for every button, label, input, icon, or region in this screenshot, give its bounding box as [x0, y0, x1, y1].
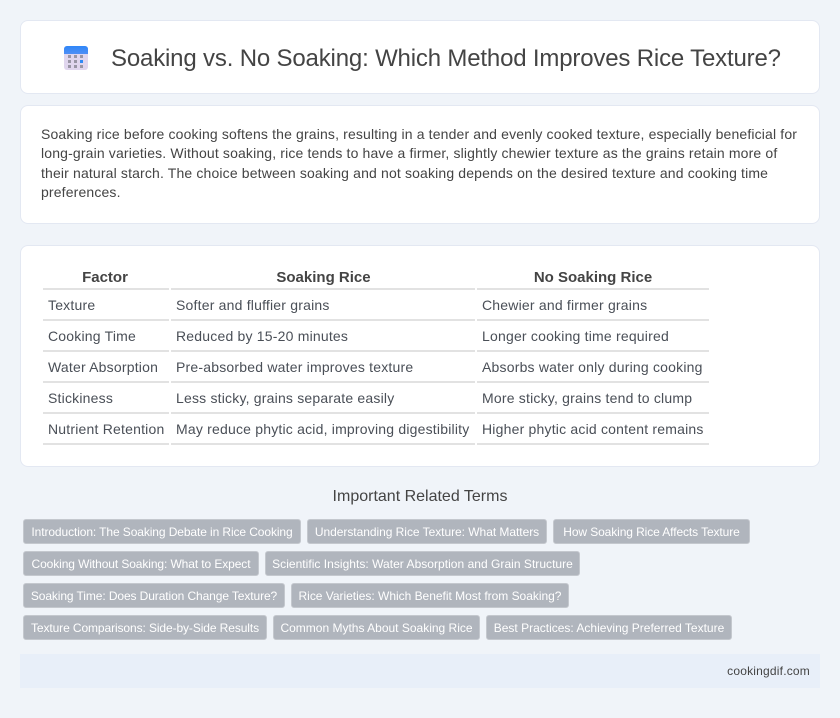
related term tags: Scientific Insights: Water Absorption and Grain Structure: [272, 557, 573, 571]
comparison table: [43, 269, 709, 445]
row: Cooking Time: Cooking Time: [48, 328, 136, 344]
related term tags: Best Practices: Achieving Preferred Texture: [494, 621, 724, 635]
row: Cooking Time: Longer cooking time required: [482, 328, 669, 344]
header panel: [20, 20, 820, 94]
related terms heading: Important Related Terms: [333, 488, 507, 505]
row: Nutrient Retention: May reduce phytic acid, improving digestibility: [176, 421, 469, 437]
row: Cooking Time: Reduced by 15-20 minutes: [176, 328, 348, 344]
intro paragraph: [41, 126, 797, 200]
row: Nutrient Retention: [48, 421, 704, 437]
footer bar: [20, 654, 820, 688]
row: Nutrient Retention: Nutrient Retention: [48, 421, 164, 437]
table header row: No Soaking Rice: [534, 269, 652, 286]
footer source: cookingdif.com: [727, 664, 810, 678]
related term tags: Soaking Time: Does Duration Change Texture?: [31, 589, 277, 603]
row: Stickiness: More sticky, grains tend to clump: [482, 390, 692, 406]
related term tags: How Soaking Rice Affects Texture: [563, 525, 740, 539]
row: Texture: Softer and fluffier grains: [176, 297, 330, 313]
row: Water Absorption: Water Absorption: [48, 359, 158, 375]
row: Texture: [48, 297, 647, 313]
table header row: Factor: [82, 269, 128, 286]
related term tags: Cooking Without Soaking: What to Expect: [32, 557, 250, 571]
row: Texture: Chewier and firmer grains: [482, 297, 647, 313]
row: Cooking Time: [48, 328, 669, 344]
related term tags: Understanding Rice Texture: What Matters: [315, 525, 539, 539]
comparison table panel: [20, 245, 820, 467]
intro text panel: [20, 105, 820, 224]
row: Water Absorption: Pre-absorbed water improves texture: [176, 359, 413, 375]
related term tags: [23, 519, 750, 640]
row: Nutrient Retention: Higher phytic acid content remains: [482, 421, 704, 437]
icon: calendar: [64, 46, 88, 70]
title: Soaking vs. No Soaking: Which Method Improves Rice Texture?: [111, 45, 781, 72]
row: Stickiness: [48, 390, 692, 406]
intro paragraph: their natural starch. The choice between soaking and not soaking depends on the desired texture and cooking time: [41, 164, 768, 180]
row: Texture: Texture: [48, 297, 95, 313]
row: Water Absorption: [48, 359, 703, 375]
row: Stickiness: Stickiness: [48, 390, 113, 406]
related term tags: Rice Varieties: Which Benefit Most from Soaking?: [299, 589, 561, 603]
intro paragraph: long-grain varieties. Without soaking, rice tends to have a firmer, slightly chewier texture as the grains retain more of: [41, 145, 777, 161]
intro paragraph: preferences.: [41, 184, 121, 200]
intro paragraph: Soaking rice before cooking softens the grains, resulting in a tender and evenly cooked texture, especially beneficial for: [41, 126, 797, 142]
table header row: [82, 269, 652, 286]
related term tags: Common Myths About Soaking Rice: [280, 621, 473, 635]
row: Water Absorption: Absorbs water only during cooking: [482, 359, 703, 375]
related term tags: Introduction: The Soaking Debate in Rice Cooking: [31, 525, 293, 539]
related term tags: Texture Comparisons: Side-by-Side Results: [31, 621, 259, 635]
table header row: Soaking Rice: [276, 269, 371, 286]
row: Stickiness: Less sticky, grains separate easily: [176, 390, 394, 406]
